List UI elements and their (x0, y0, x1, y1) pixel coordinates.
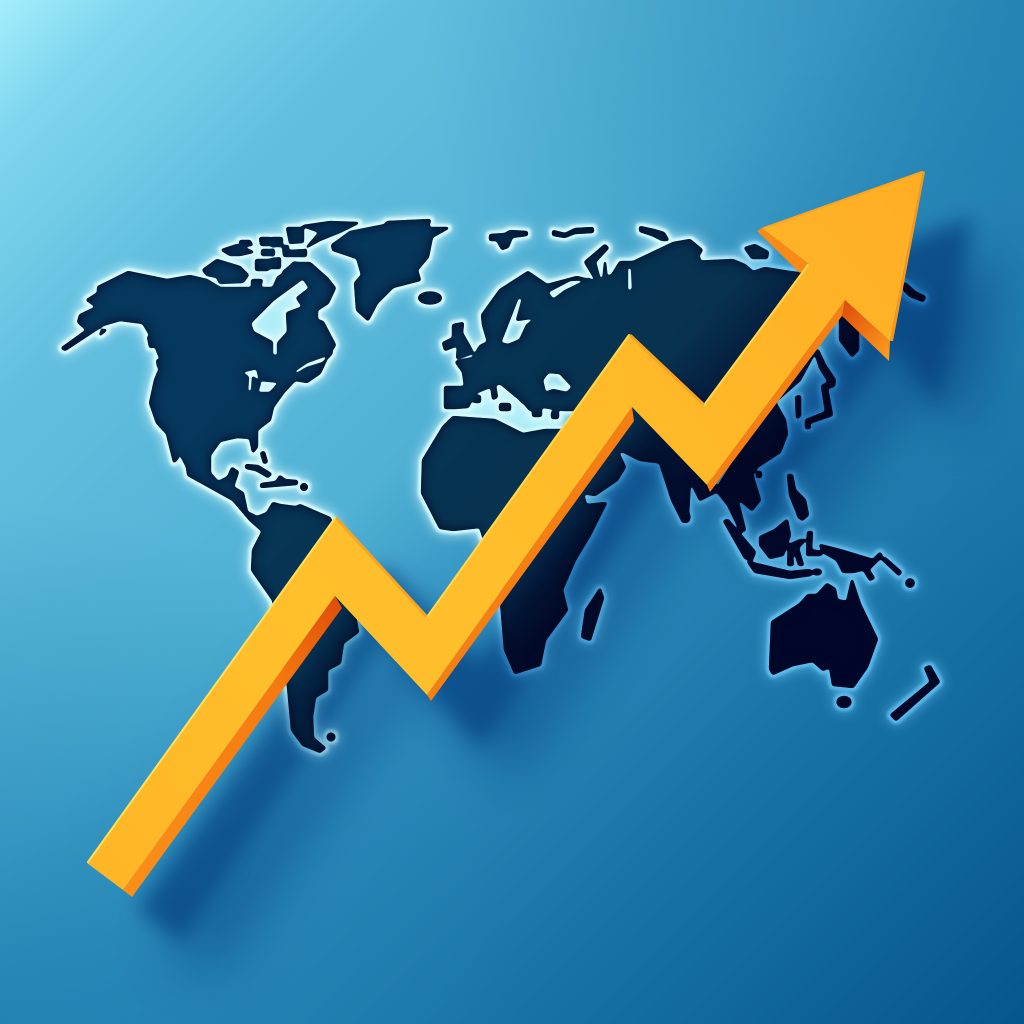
Caribbean islet (301, 484, 307, 490)
Russian far east (904, 283, 925, 301)
Lesser Sunda islet (813, 570, 821, 574)
Eurasia (445, 240, 835, 470)
Arctic islands of Eurasia (490, 227, 768, 258)
Sumatra (724, 520, 755, 560)
Iceland (419, 292, 441, 304)
Africa (422, 417, 606, 673)
arrow shadow (137, 217, 1003, 977)
Sulawesi (788, 532, 821, 565)
Arabian peninsula (582, 440, 625, 495)
Greenland (332, 220, 448, 320)
Sri Lanka (682, 512, 690, 522)
map glow outline (62, 220, 939, 752)
arrow side faces (123, 171, 925, 897)
Madagascar (582, 589, 603, 640)
pale inland seas behind the map (252, 282, 572, 432)
Borneo (760, 520, 790, 558)
Pacific islands (862, 558, 901, 580)
Pacific coast islets (100, 330, 160, 367)
rising arrow (87, 171, 925, 897)
Falkland islet (328, 734, 334, 740)
Indian subcontinent (617, 420, 720, 522)
arrow highlights (88, 172, 922, 862)
Arctic archipelago (203, 222, 358, 288)
Japan (840, 315, 858, 356)
East Asian coast (796, 350, 835, 428)
Southeast Asia (716, 340, 815, 532)
Pacific islet (906, 579, 914, 587)
Java (748, 562, 811, 578)
world map (62, 220, 939, 752)
New Zealand (891, 666, 939, 720)
North and Central America (62, 263, 345, 600)
Philippines (788, 475, 808, 520)
New Guinea (820, 545, 882, 572)
Tasmania (838, 697, 850, 707)
Mediterranean islands (474, 378, 558, 418)
Britain and Ireland (443, 323, 473, 358)
South America (252, 505, 358, 752)
arrow top face (87, 171, 923, 890)
Caribbean islands (246, 452, 297, 487)
Australia (770, 580, 877, 687)
